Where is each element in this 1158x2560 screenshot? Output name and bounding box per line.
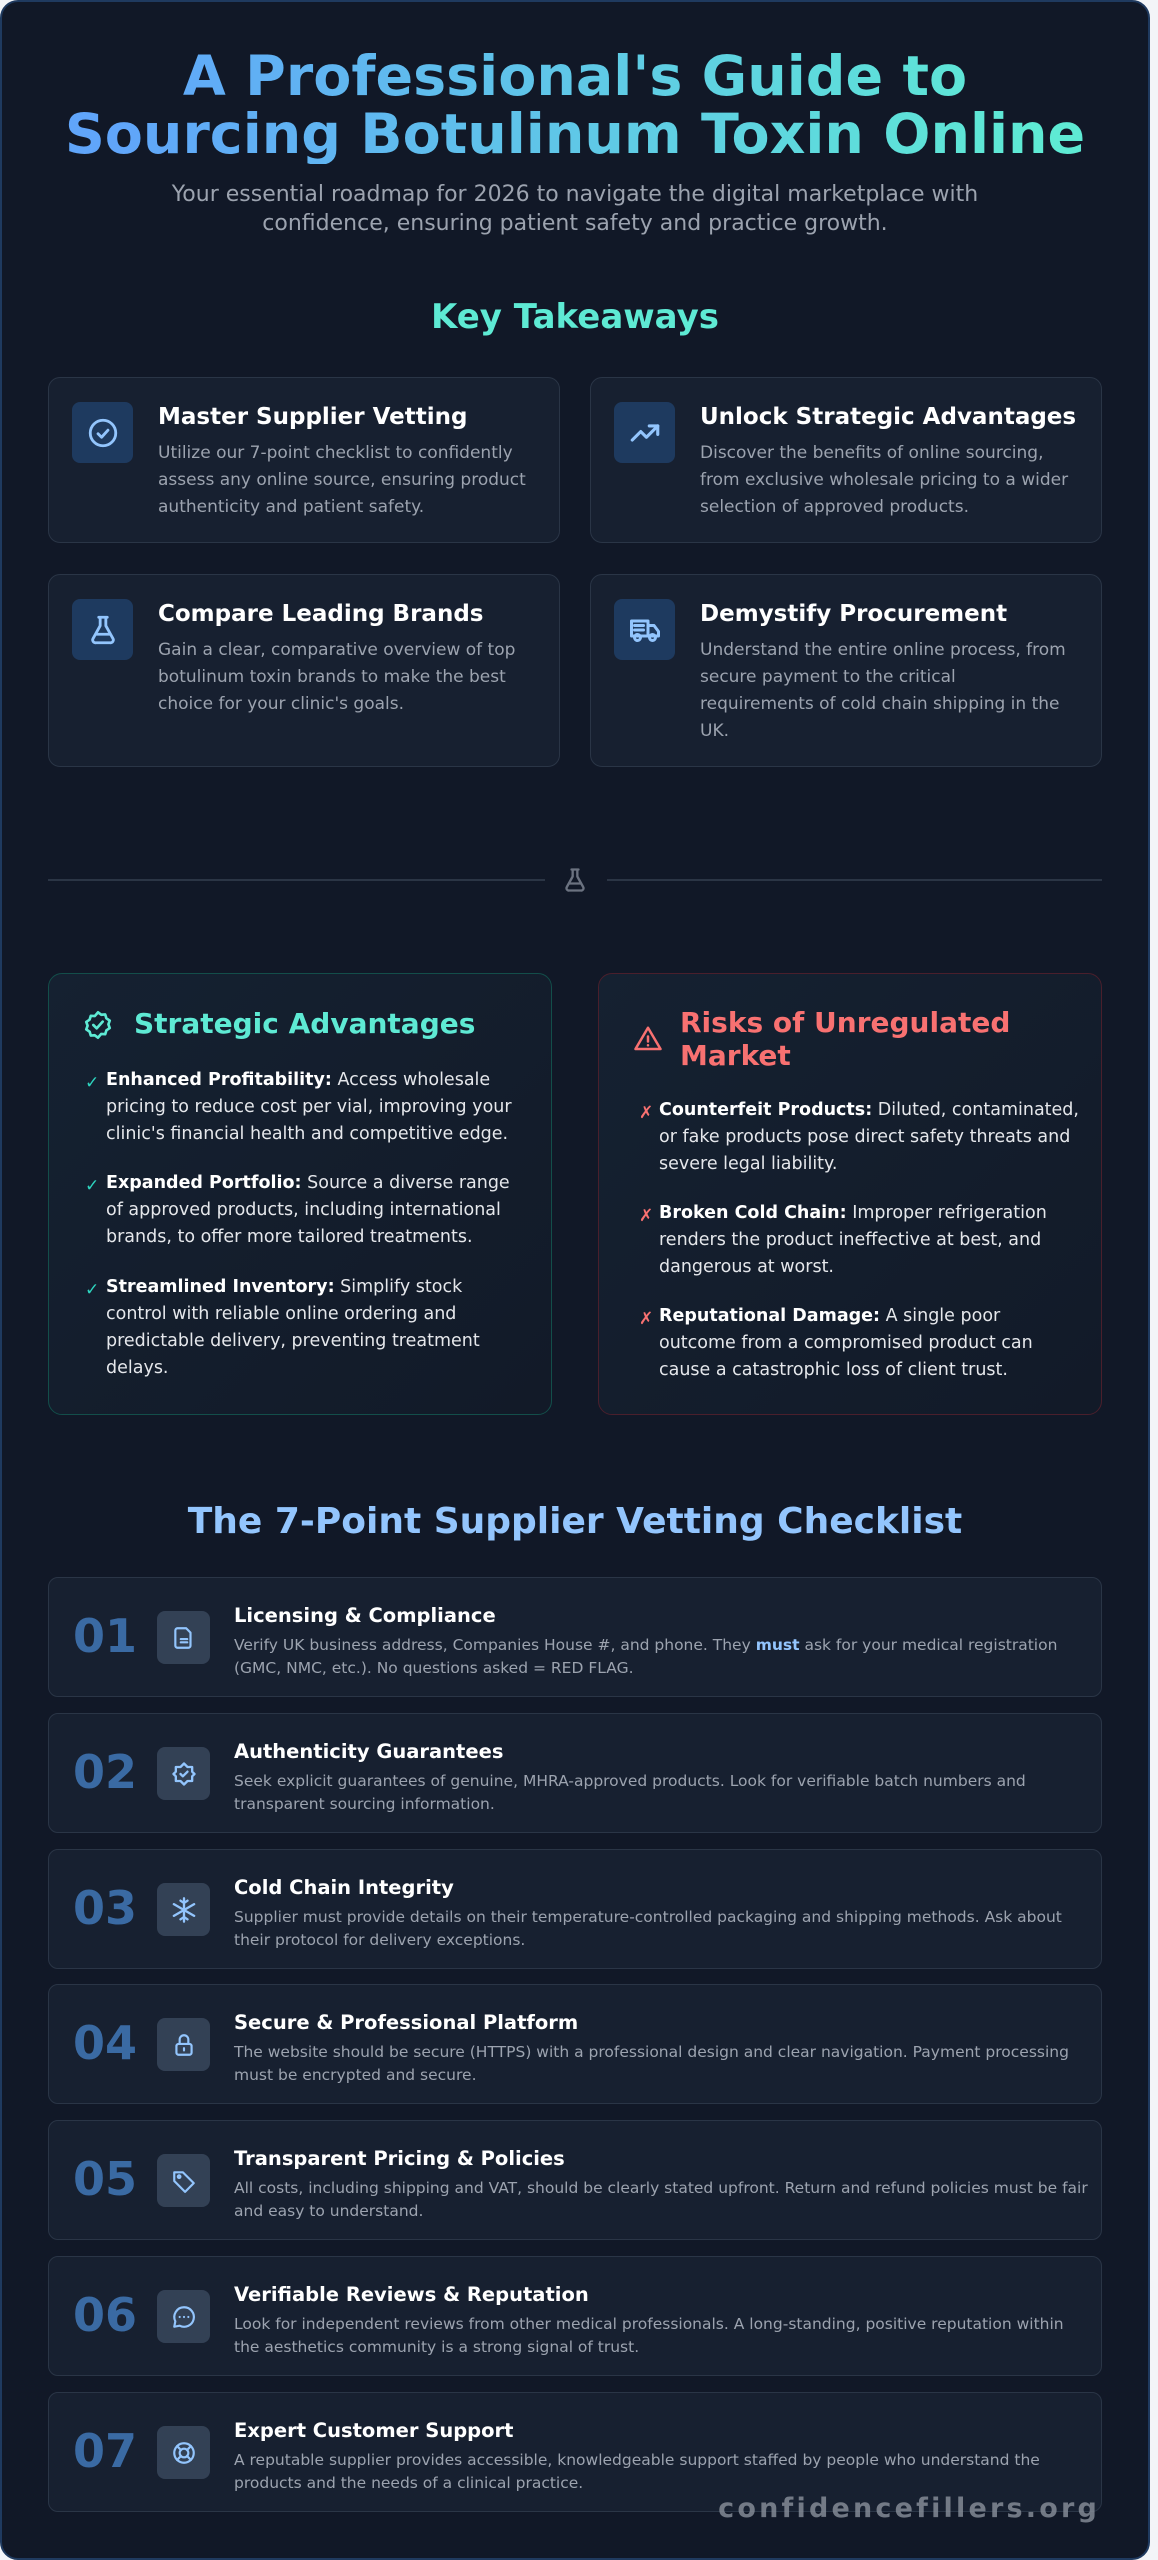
icon: lifebuoy (157, 2426, 210, 2479)
panel: risks of unregulated market: ✗ (639, 1103, 653, 1123)
card: unlock strategic advantages: Discover the benefits of online sourcing, from exclusive wholesale pricing to a wider selection of approved products. (700, 443, 1068, 517)
item: reputational damage (639, 1306, 1033, 1380)
checklist item 02 (48, 1713, 1102, 1833)
icon: chat bubble (157, 2290, 210, 2343)
item: counterfeit products: Counterfeit Products: Diluted, contaminated, (659, 1100, 1079, 1120)
checklist item 05: All costs, including shipping and VAT, should be clearly stated upfront. Return and refund policies must be fair (234, 2179, 1088, 2197)
item: enhanced profitability: Enhanced Profitability: Access wholesale pricing to reduce cost per vial, improving your clinic's financial health and competitive edge. (106, 1070, 512, 1144)
checklist item 04: The website should be secure (HTTPS) with a professional design and clear navigation. Payment processing must be encrypted and secure. (234, 2043, 1069, 2084)
card: compare leading brands: Gain a clear, comparative overview of top botulinum toxin brands to make the best choice for your clinic's goals. (158, 640, 515, 714)
checklist item 06 (48, 2256, 1102, 2376)
icon: tag (157, 2154, 210, 2207)
item: reputational damage: outcome from a compromised product can cause a catastrophic loss of client trust. (659, 1333, 1033, 1380)
checklist item 03 (48, 1849, 1102, 1969)
icon: snowflake (157, 1883, 210, 1936)
panel: risks of unregulated market: ✗ (639, 1309, 653, 1329)
checklist item 01 (48, 1577, 1102, 1697)
icon: badge check (157, 1747, 210, 1800)
item: reputational damage: Reputational Damage: A single poor (659, 1306, 1000, 1326)
card: master supplier vetting: Utilize our 7-point checklist to confidently assess any online source, ensuring product authenticity and patient safety. (158, 443, 526, 517)
panel: risks of unregulated market: ✗ (639, 1206, 653, 1226)
checklist item 04 (48, 1984, 1102, 2104)
checklist item 04: 04 (73, 2016, 137, 2070)
checklist item 04: Secure & Professional Platform (234, 2011, 578, 2034)
subtitle: Your essential roadmap for 2026 to navigate the digital marketplace with (172, 182, 978, 207)
card: compare leading brands (48, 574, 560, 767)
checklist item 06: 06 (73, 2288, 137, 2342)
checklist item 01: Licensing & Compliance (234, 1604, 496, 1627)
card: unlock strategic advantages: Unlock Strategic Advantages (700, 404, 1076, 430)
icon: flask (72, 599, 133, 660)
checklist item 02: Seek explicit guarantees of genuine, MHRA-approved products. Look for verifiable batch numbers and transparent sourcing information. (234, 1772, 1026, 1813)
watermark: confidencefillers.org (718, 2493, 1100, 2524)
checklist item 05: and easy to understand. (234, 2202, 423, 2220)
item: counterfeit products (639, 1100, 1079, 1174)
card: compare leading brands: Compare Leading Brands (158, 601, 483, 627)
heading: risks: Risks of Unregulated (680, 1006, 1010, 1039)
card: demystify procurement: Demystify Procurement (700, 601, 1007, 627)
item: streamlined inventory: Streamlined Inventory: Simplify stock control with reliable online ordering and predictable delivery, preventing treatment delays. (106, 1277, 480, 1378)
card: unlock strategic advantages (590, 377, 1102, 543)
card: master supplier vetting: Master Supplier Vetting (158, 404, 467, 430)
icon: truck (614, 599, 675, 660)
divider with flask icon (48, 868, 1102, 892)
checklist item 01: Verify UK business address, Companies House #, and phone. They must ask for your medical registration (GMC, NMC, etc.). No questions asked = RED FLAG. (234, 1636, 1057, 1677)
title (0, 48, 1150, 164)
item: counterfeit products: or fake products pose direct safety threats and severe legal liability. (659, 1127, 1070, 1174)
heading: checklist: The 7-Point Supplier Vetting Checklist (188, 1501, 962, 1542)
subtitle: confidence, ensuring patient safety and practice growth. (262, 211, 888, 236)
checklist item 07: A reputable supplier provides accessible, knowledgeable support staffed by people who understand the products and the needs of a clinical practice. (234, 2451, 1040, 2492)
heading: strategic advantages: Strategic Advantages (134, 1007, 475, 1040)
card: demystify procurement: Understand the entire online process, from secure payment to the critical requirements of cold chain shipping in the UK. (700, 640, 1066, 741)
checklist item 07: 07 (73, 2424, 137, 2478)
checklist item 06: Look for independent reviews from other medical professionals. A long-standing, positive reputation within the aesthetics community is a strong signal of trust. (234, 2315, 1064, 2356)
checklist item 07: Expert Customer Support (234, 2419, 513, 2442)
heading: risks (634, 1006, 1010, 1072)
checklist item 03: their protocol for delivery exceptions. (234, 1931, 525, 1949)
checklist item 02: 02 (73, 1745, 137, 1799)
icon: trend arrow (614, 402, 675, 463)
checklist item 06: Verifiable Reviews & Reputation (234, 2283, 589, 2306)
title: Sourcing Botulinum Toxin Online (65, 102, 1085, 167)
panel: risks of unregulated market (598, 973, 1102, 1415)
icon: document (157, 1611, 210, 1664)
checklist item 03: Cold Chain Integrity (234, 1876, 454, 1899)
checklist item 05: Transparent Pricing & Policies (234, 2147, 565, 2170)
checklist item 01: 01 (73, 1609, 137, 1663)
panel: strategic advantages: ✓ (85, 1073, 99, 1093)
item: broken cold chain: Broken Cold Chain: Improper refrigeration renders the product ineffective at best, and dangerous at worst. (659, 1203, 1047, 1277)
card: master supplier vetting (48, 377, 560, 543)
heading: key takeaways: Key Takeaways (431, 297, 719, 337)
checklist item 02: Authenticity Guarantees (234, 1740, 503, 1763)
checklist item 03: 03 (73, 1881, 137, 1935)
checklist item 05: 05 (73, 2152, 137, 2206)
panel: strategic advantages: ✓ (85, 1176, 99, 1196)
checklist item 03: Supplier must provide details on their temperature-controlled packaging and shipping methods. Ask about (234, 1908, 1062, 1926)
checklist item 05 (48, 2120, 1102, 2240)
panel: strategic advantages (48, 973, 552, 1415)
title: A Professional's Guide to (183, 44, 967, 109)
icon: check circle (72, 402, 133, 463)
subtitle (172, 182, 978, 236)
checklist item 07 (48, 2392, 1102, 2512)
icon: lock (157, 2018, 210, 2071)
card: demystify procurement (590, 574, 1102, 767)
panel: strategic advantages: ✓ (85, 1280, 99, 1300)
heading: risks: Market (680, 1039, 791, 1072)
item: expanded portfolio: Expanded Portfolio: Source a diverse range of approved products, including international brands, to offer more tailored treatments. (106, 1173, 510, 1247)
